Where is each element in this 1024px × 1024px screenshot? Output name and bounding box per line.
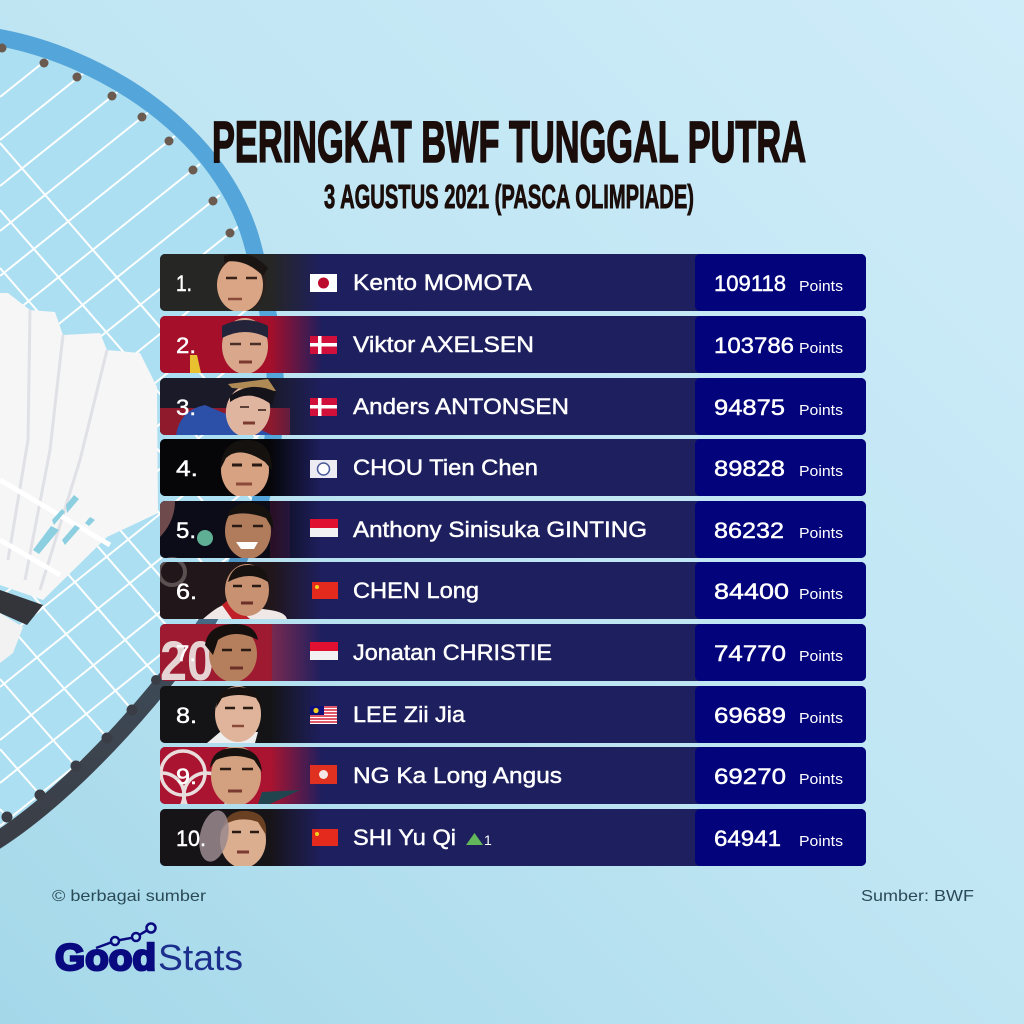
row 1: Kento Momota: 109118 [714, 271, 786, 296]
row 1: Kento Momota: Points [799, 278, 843, 295]
row 10: Shi Yu Qi: 1 [484, 832, 492, 848]
row 9: Ng Ka Long Angus: 9. [176, 764, 197, 789]
row 2: Viktor Axelsen: Viktor AXELSEN [353, 332, 534, 357]
GoodStats logo [55, 924, 243, 978]
row 3: Anders Antonsen: Points [799, 402, 843, 419]
photo credit: © berbagai sumber [52, 888, 207, 905]
row 1: Kento Momota [160, 252, 866, 312]
row 7: Jonatan Christie: Points [799, 648, 843, 665]
row 6: Chen Long: CHEN Long [353, 578, 479, 603]
row 7: Jonatan Christie: 7. [176, 641, 196, 666]
row 6: Chen Long [159, 559, 866, 619]
row 9: Ng Ka Long Angus [160, 747, 866, 804]
row 6: Chen Long: 84400 [714, 579, 789, 604]
row 2: Viktor Axelsen: 2. [176, 333, 196, 358]
row 10: Shi Yu Qi: Points [799, 833, 843, 850]
row 7: Jonatan Christie: Jonatan CHRISTIE [353, 640, 552, 665]
source: Sumber: BWF [861, 888, 974, 905]
row 4: Chou Tien Chen: CHOU Tien Chen [353, 455, 538, 480]
row 6: Chen Long: Points [799, 586, 843, 603]
row 7: Jonatan Christie: 20 [160, 629, 214, 692]
row 3: Anders Antonsen: 94875 [714, 395, 785, 420]
subtitle: 3 AGUSTUS 2021 (PASCA OLIMPIADE) [324, 178, 694, 215]
row 3: Anders Antonsen: Anders ANTONSEN [353, 394, 569, 419]
row 9: Ng Ka Long Angus: NG Ka Long Angus [353, 763, 562, 788]
row 8: Lee Zii Jia: Points [799, 710, 843, 727]
row 4: Chou Tien Chen: Points [799, 463, 843, 480]
row 9: Ng Ka Long Angus: Points [799, 771, 843, 788]
row 4: Chou Tien Chen: 89828 [714, 456, 785, 481]
row 8: Lee Zii Jia: 8. [176, 703, 197, 728]
row 10: Shi Yu Qi [160, 808, 866, 868]
row 3: Anders Antonsen: 3. [176, 395, 196, 420]
row 5: Anthony Sinisuka Ginting: Anthony Sinisuka GINTING [353, 517, 647, 542]
row 5: Anthony Sinisuka Ginting [160, 501, 866, 559]
GoodStats logo: Stats [158, 937, 243, 978]
row 1: Kento Momota: Kento MOMOTA [353, 270, 532, 295]
racket [0, 36, 300, 845]
row 2: Viktor Axelsen: Points [799, 340, 843, 357]
row 10: Shi Yu Qi: 64941 [714, 826, 781, 851]
row 4: Chou Tien Chen [160, 439, 866, 498]
row 5: Anthony Sinisuka Ginting: 5. [176, 518, 196, 543]
row 5: Anthony Sinisuka Ginting: 86232 [714, 518, 784, 543]
row 5: Anthony Sinisuka Ginting: Points [799, 525, 843, 542]
row 8: Lee Zii Jia: 69689 [714, 703, 786, 728]
row 7: Jonatan Christie: 74770 [714, 641, 786, 666]
row 4: Chou Tien Chen: 4. [176, 456, 198, 481]
GoodStats logo: Good [55, 937, 156, 978]
row 10: Shi Yu Qi: SHI Yu Qi [353, 825, 456, 850]
shuttlecock [0, 293, 158, 663]
row 2: Viktor Axelsen: 103786 [714, 333, 794, 358]
row 8: Lee Zii Jia [160, 686, 866, 743]
row 3: Anders Antonsen [160, 378, 866, 441]
row 9: Ng Ka Long Angus: 69270 [714, 764, 786, 789]
row 1: Kento Momota: 1. [176, 271, 192, 296]
row 2: Viktor Axelsen [160, 316, 866, 374]
row 7: Jonatan Christie [160, 624, 866, 681]
row 8: Lee Zii Jia: LEE Zii Jia [353, 702, 466, 727]
row 6: Chen Long: 6. [176, 579, 197, 604]
row 10: Shi Yu Qi: 10. [176, 826, 206, 851]
